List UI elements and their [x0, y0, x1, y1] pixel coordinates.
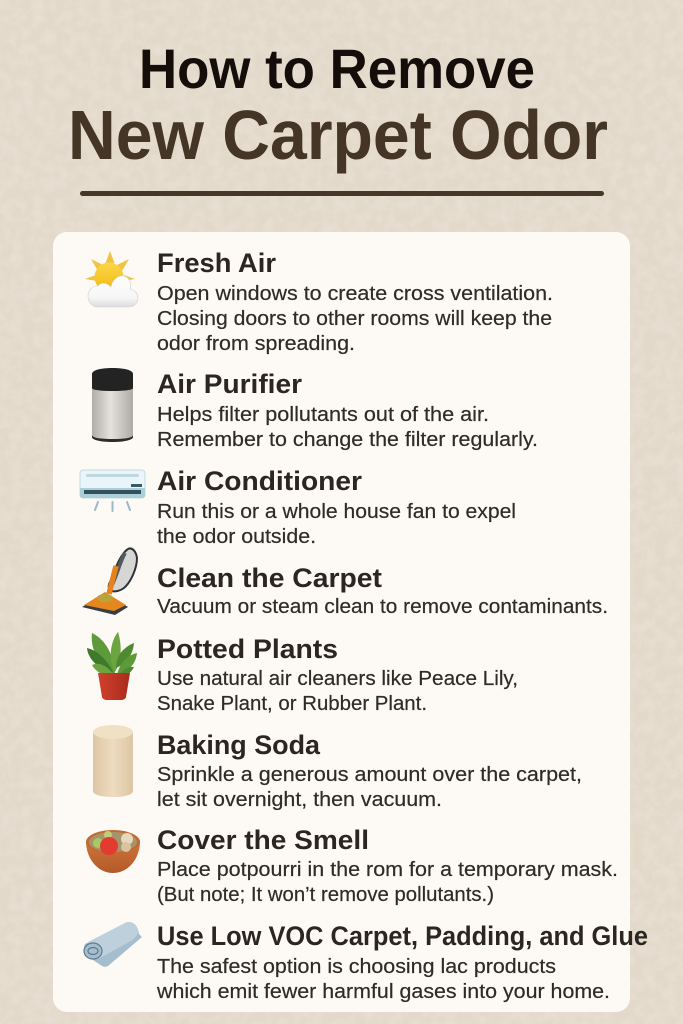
description: (But note; It won’t remove pollutants.)	[157, 884, 494, 906]
description	[156, 956, 610, 1003]
icon: canister	[93, 725, 133, 797]
title line 2: New Carpet Odor	[68, 96, 608, 174]
heading: Use Low VOC Carpet, Padding, and Glue	[157, 921, 648, 951]
description: Run this or a whole house fan to expel	[157, 501, 516, 523]
item: Air Conditioner	[80, 466, 516, 548]
white content panel	[53, 232, 630, 1012]
description: odor from spreading.	[157, 333, 355, 355]
description: the odor outside.	[157, 526, 316, 548]
heading: Cover the Smell	[157, 825, 369, 855]
description: Sprinkle a generous amount over the carpet,	[157, 764, 582, 786]
description: Remember to change the filter regularly.	[157, 429, 538, 451]
description	[157, 501, 516, 548]
description	[157, 859, 618, 906]
item: Use Low VOC Carpet	[84, 921, 648, 1003]
item: Air Purifier	[92, 368, 538, 451]
description: Closing doors to other rooms will keep the	[157, 308, 552, 330]
heading: Baking Soda	[157, 730, 321, 760]
heading: Clean the Carpet	[157, 563, 382, 593]
description: Open windows to create cross ventilation.	[157, 283, 553, 305]
description	[157, 668, 518, 715]
icon: sun and cloud	[85, 251, 138, 307]
icon: potpourri bowl	[86, 830, 140, 873]
heading: Air Purifier	[157, 369, 302, 399]
description: Use natural air cleaners like Peace Lily,	[157, 668, 518, 690]
item: Potted Plants	[87, 632, 518, 715]
description	[157, 404, 538, 451]
description: The safest option is choosing lac products	[157, 956, 556, 978]
description: let sit overnight, then vacuum.	[157, 789, 442, 811]
description	[157, 764, 582, 811]
heading: Fresh Air	[157, 248, 276, 278]
icon: rolled carpet	[84, 922, 142, 967]
title line 1: How to Remove	[139, 37, 535, 100]
title	[68, 37, 608, 174]
description: Helps filter pollutants out of the air.	[157, 404, 489, 426]
description: Vacuum or steam clean to remove contaminants.	[157, 596, 608, 618]
icon: potted plant	[87, 632, 137, 700]
icon: vacuum cleaner	[82, 548, 137, 615]
description: Snake Plant, or Rubber Plant.	[157, 693, 427, 715]
heading: Air Conditioner	[157, 466, 363, 496]
icon: air conditioner	[80, 470, 145, 511]
icon: air purifier	[92, 368, 133, 442]
description: Place potpourri in the rom for a temporary mask.	[157, 859, 618, 881]
description: which emit fewer harmful gases into your home.	[156, 981, 610, 1003]
description	[157, 283, 553, 355]
item: Clean the Carpet	[82, 548, 608, 618]
heading: Potted Plants	[157, 634, 338, 664]
item: Baking Soda	[93, 725, 582, 811]
item: Cover the Smell	[86, 825, 618, 906]
item: Fresh Air	[85, 248, 553, 355]
